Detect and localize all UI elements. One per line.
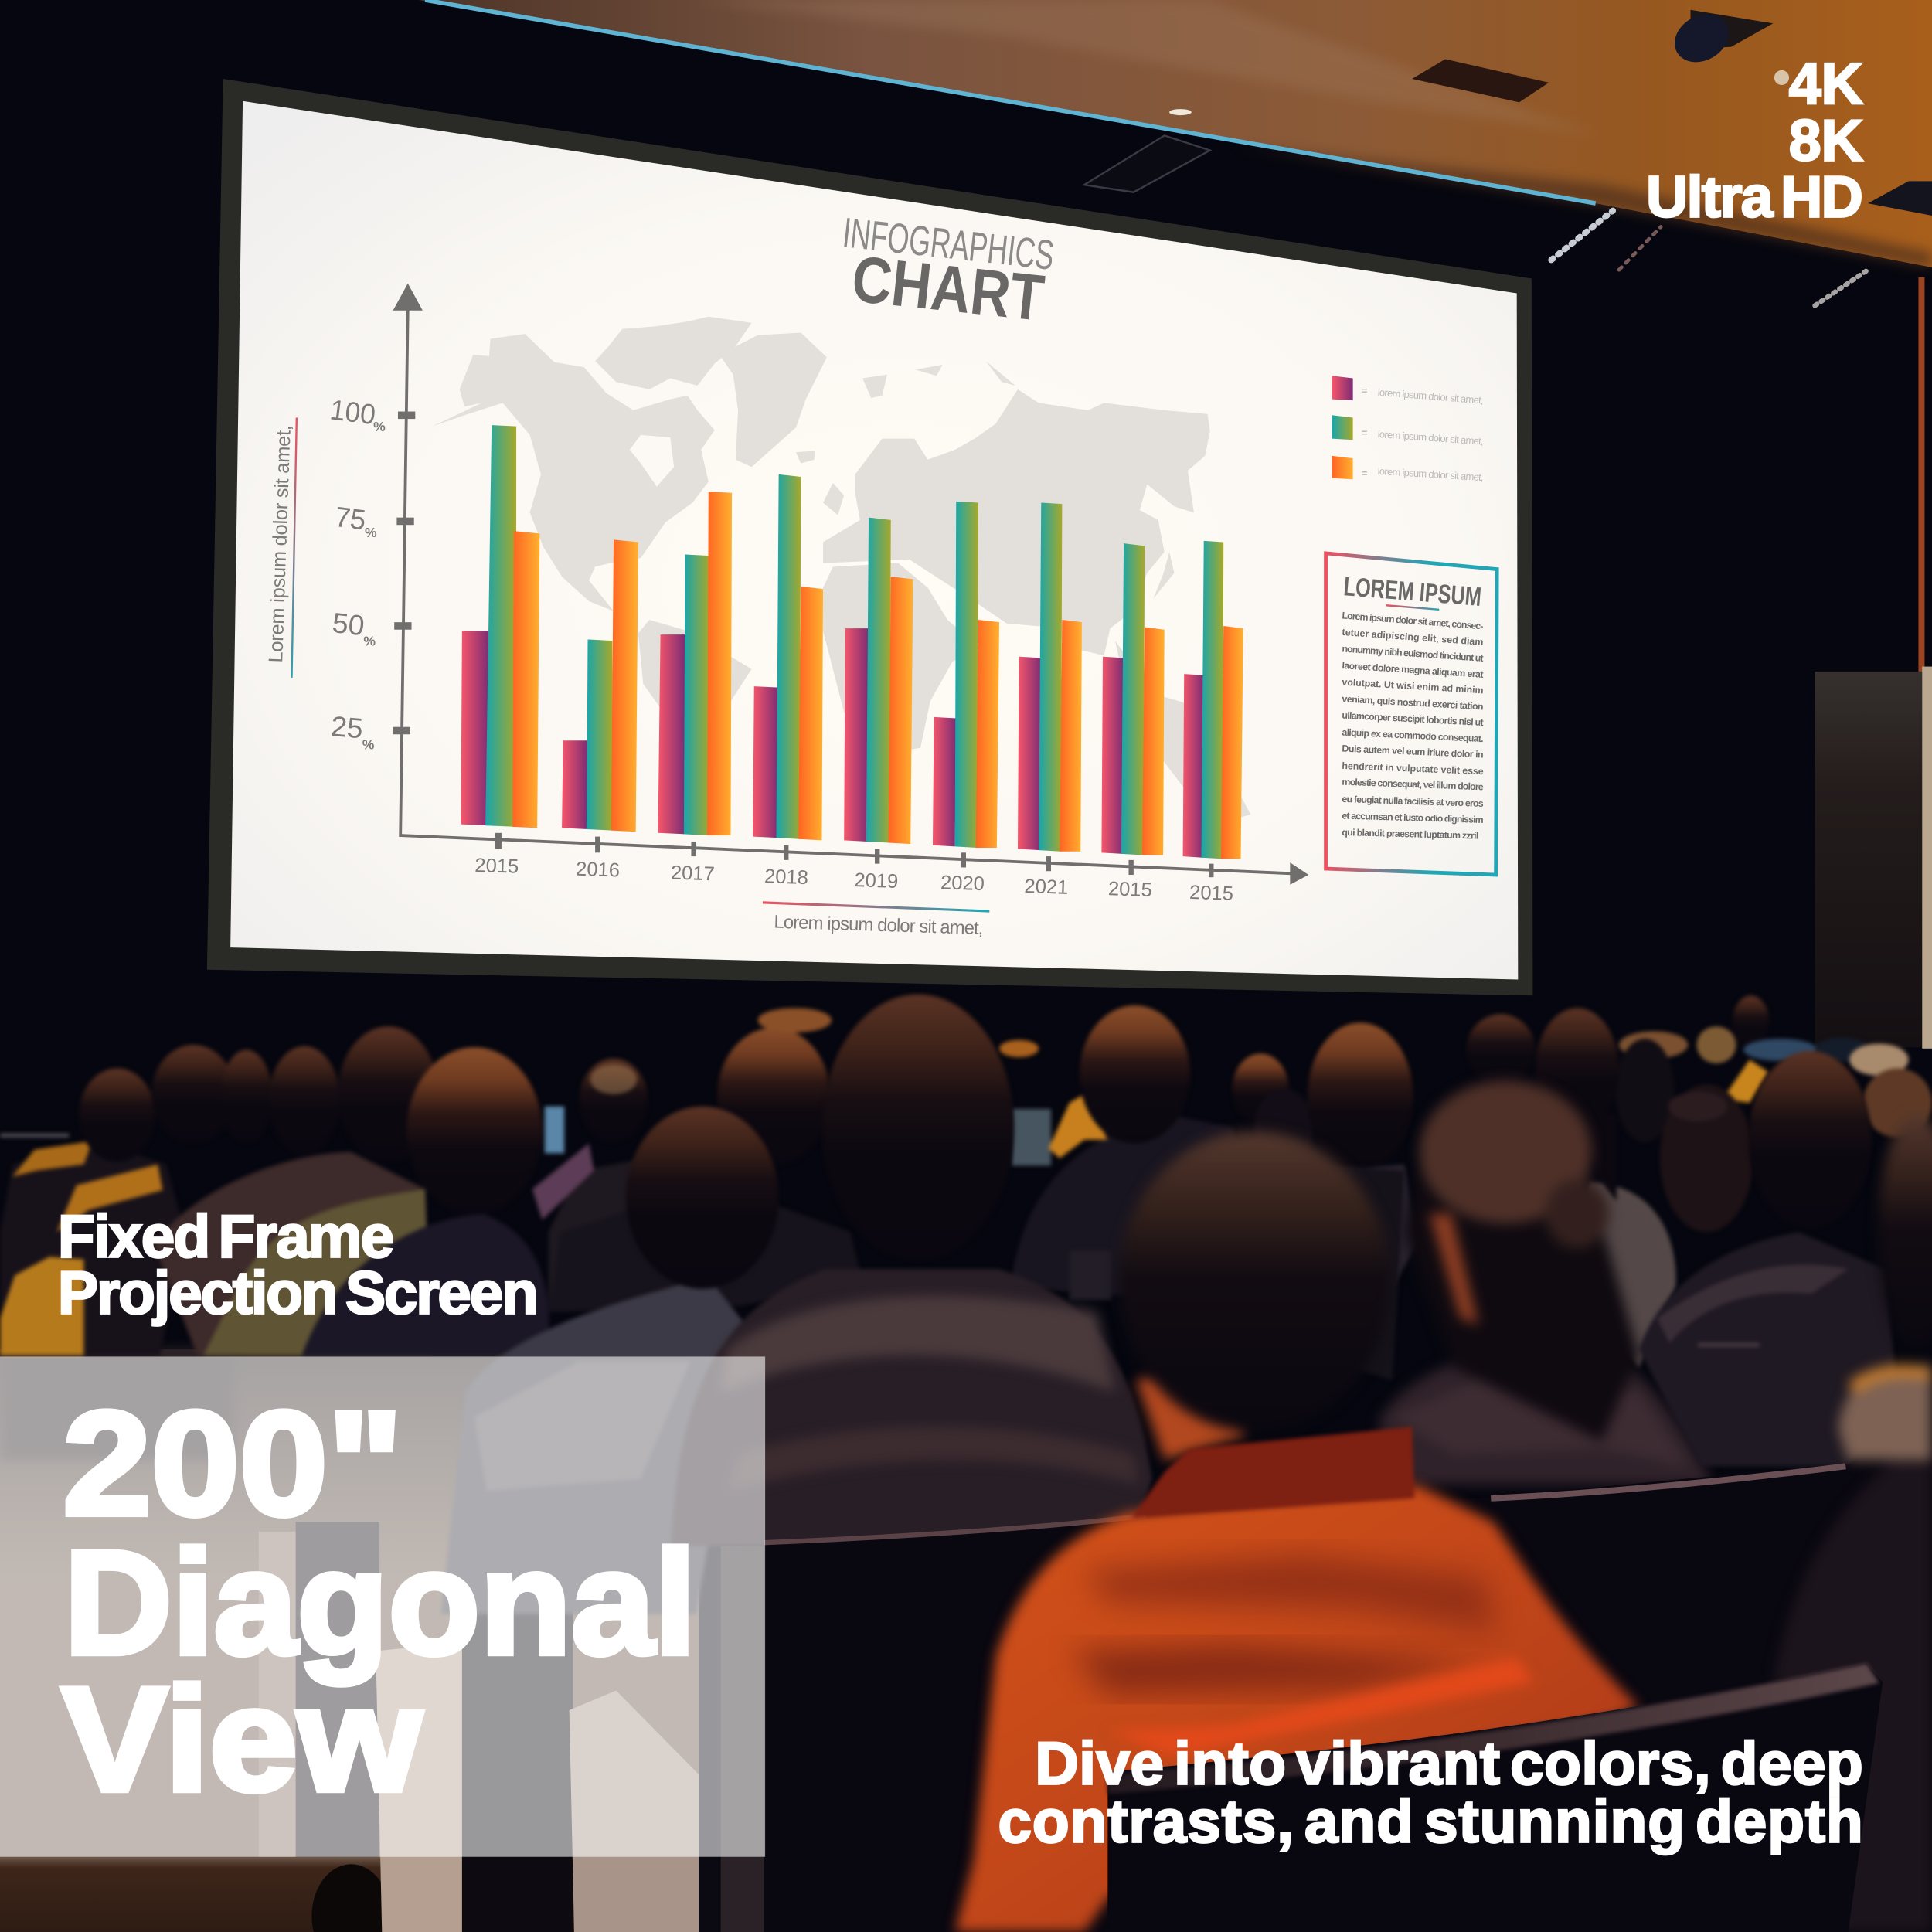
- small heads far back right: [1232, 995, 1932, 1232]
- Hudson Bay cutout: [630, 435, 674, 487]
- person with ponytail: [1536, 1008, 1676, 1368]
- resolution labels: 4K: [1789, 51, 1863, 116]
- lorem ipsum text box: [1326, 553, 1497, 875]
- y axis percent labels: %: [365, 525, 377, 540]
- lorem ipsum text box: veniam, quis nostrud exerci tation: [1342, 693, 1484, 713]
- olive jacket person: [154, 1026, 439, 1355]
- bars 2020: [933, 502, 999, 848]
- right person in dark jacket: [1639, 1051, 1897, 1466]
- bars 2019: [844, 518, 913, 844]
- x axis year labels: 2019: [854, 869, 899, 893]
- North America: [433, 334, 715, 611]
- Japan: [1153, 552, 1174, 599]
- lorem ipsum text box: ullamcorper suscipit lobortis nisl ut: [1342, 710, 1484, 728]
- seat back row with curved rails: [764, 1454, 1932, 1932]
- centre-left person: [549, 1008, 862, 1312]
- Iceland: [796, 451, 815, 463]
- bars 2021: [1018, 503, 1082, 852]
- y axis percent labels: 25: [330, 710, 364, 744]
- lorem ipsum text box: molestie consequat, vel illum dolore: [1342, 777, 1484, 792]
- framed projection screen: [207, 79, 1532, 995]
- right foreground person with hand: [1774, 1115, 1932, 1932]
- Eurasia: [823, 389, 1210, 655]
- y axis caption: Lorem ipsum dolor sit amet,: [265, 424, 295, 663]
- Africa: [823, 563, 980, 754]
- lorem ipsum text box: volutpat. Ut wisi enim ad minim: [1342, 676, 1484, 696]
- phone person: [532, 1059, 665, 1306]
- bars 2015: [461, 425, 539, 828]
- hoodie person: [302, 1047, 549, 1355]
- heading: fixed frame projection screen: Projection Screen: [58, 1259, 539, 1327]
- foreground person in orange jacket: [955, 1131, 1639, 1932]
- heading: 200 inch diagonal view: View: [62, 1657, 423, 1822]
- resolution labels: [1646, 51, 1863, 230]
- x axis year labels: 2015: [474, 855, 519, 878]
- foreground seat back: [1107, 1663, 1883, 1932]
- heading: 200 inch diagonal view: 200": [63, 1381, 403, 1546]
- right side wall panel: [1815, 277, 1932, 1049]
- lorem ipsum text box: Lorem ipsum dolor sit amet, consec-: [1342, 610, 1484, 631]
- legend: =: [1362, 427, 1368, 438]
- large centre person: [672, 995, 1152, 1546]
- legend: =: [1362, 385, 1368, 396]
- heading: fixed frame projection screen: [58, 1202, 539, 1327]
- bars 2016: [562, 539, 638, 832]
- x axis year labels: 2021: [1024, 876, 1069, 899]
- x axis year labels: 2017: [670, 862, 715, 885]
- floor and aisle at lower left: [0, 1349, 788, 1932]
- legend: [1332, 376, 1484, 483]
- middle row of audience: [441, 995, 1897, 1614]
- Arctic islands: [595, 317, 752, 389]
- lorem ipsum text box: hendrerit in vulputate velit esse: [1342, 760, 1484, 777]
- x axis year labels: [474, 855, 1233, 905]
- left cluster with orange jackets: [0, 1045, 340, 1355]
- Australia and islands: [1115, 641, 1250, 825]
- lorem ipsum text box: eu feugiat nulla facilisis at vero eros: [1342, 794, 1484, 809]
- tagline: [998, 1730, 1863, 1855]
- chart title: INFOGRAPHICS: [841, 209, 1056, 279]
- x axis caption: Lorem ipsum dolor sit amet,: [774, 912, 984, 939]
- legend: lorem ipsum dolor sit amet,: [1377, 386, 1484, 406]
- lorem ipsum text box: tetuer adipiscing elit, sed diam: [1342, 627, 1484, 648]
- y axis percent labels: %: [362, 736, 375, 752]
- y axis percent labels: 50: [331, 607, 366, 641]
- bars 2017: [658, 492, 732, 835]
- y axis percent labels: [328, 393, 386, 752]
- legend: lorem ipsum dolor sit amet,: [1377, 428, 1484, 447]
- stage lights: [1551, 211, 1868, 305]
- dark seated person in centre: [1070, 1165, 1405, 1380]
- world map silhouette: [433, 317, 1250, 825]
- y axis percent labels: %: [363, 633, 376, 648]
- lorem ipsum text box: LOREM IPSUM: [1342, 572, 1482, 612]
- person behind woman: [1306, 1022, 1417, 1331]
- y axis percent labels: %: [373, 419, 386, 434]
- lorem ipsum text box: Duis autem vel eum iriure dolor in: [1342, 743, 1484, 760]
- lorem ipsum text box: et accumsan et iusto odio dignissim: [1342, 810, 1484, 825]
- legend: lorem ipsum dolor sit amet,: [1377, 465, 1484, 483]
- y axis percent labels: 100: [328, 393, 377, 430]
- x axis year labels: 2016: [576, 859, 620, 882]
- bar chart: [461, 425, 1243, 859]
- x axis year labels: 2015: [1189, 882, 1233, 905]
- heading: 200 inch diagonal view: Diagonal: [64, 1520, 696, 1685]
- tagline: Dive into vibrant colors, deep: [1035, 1730, 1863, 1798]
- woman with hair bun: [1380, 1080, 1713, 1485]
- lorem ipsum text box: qui blandit praesent luptatum zzril: [1342, 827, 1478, 842]
- British Isles: [823, 483, 844, 515]
- resolution labels: 8K: [1789, 107, 1863, 172]
- resolution labels: Ultra HD: [1646, 165, 1863, 230]
- chart title: CHART: [849, 242, 1047, 335]
- lorem ipsum text box: aliquip ex ea commodo consequat.: [1342, 727, 1484, 744]
- translucent title panel: [0, 1356, 765, 1857]
- back rows of audience: [0, 995, 1932, 1368]
- centre-right person: [999, 1005, 1281, 1306]
- y axis percent labels: 75: [333, 501, 368, 536]
- x axis year labels: 2020: [940, 872, 985, 895]
- tagline: contrasts, and stunning depth: [998, 1787, 1863, 1855]
- bars 2015 second: [1101, 543, 1165, 855]
- aisle seat backs: [259, 1497, 773, 1932]
- South America: [638, 620, 752, 740]
- Svalbard and Arctic Russia: [862, 361, 1015, 398]
- bars 2018: [753, 474, 823, 840]
- heading: fixed frame projection screen: Fixed Frame: [58, 1202, 394, 1270]
- chart axes with ticks and arrows: [393, 284, 1308, 885]
- ceiling projector fixture: [1084, 135, 1210, 192]
- x axis year labels: 2015: [1107, 878, 1152, 901]
- x axis year labels: 2018: [764, 866, 808, 889]
- chart title: [841, 209, 1056, 335]
- lorem ipsum text box: nonummy nibh euismod tincidunt ut: [1342, 643, 1484, 664]
- person in blue-grey jacket: [441, 1107, 779, 1614]
- legend: =: [1362, 468, 1368, 479]
- lorem ipsum text box: laoreet dolore magna aliquam erat: [1342, 660, 1484, 680]
- bars 2015 third: [1183, 541, 1243, 859]
- Greenland: [719, 332, 827, 467]
- heading: 200 inch diagonal view: [62, 1381, 696, 1822]
- x axis caption: [763, 901, 989, 939]
- wood ceiling with lights: [419, 0, 1932, 269]
